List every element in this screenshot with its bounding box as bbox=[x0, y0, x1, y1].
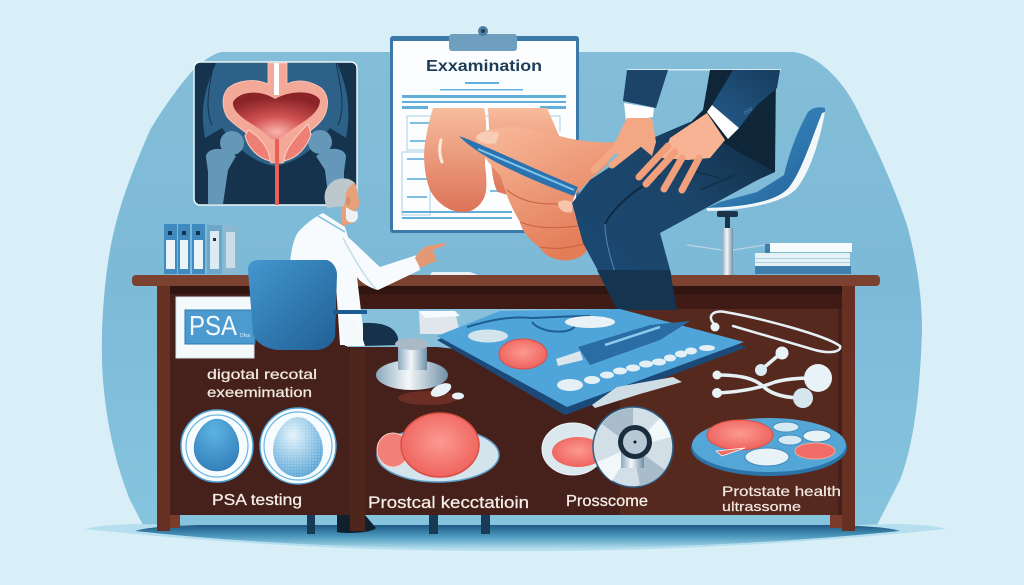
filing binders bbox=[164, 224, 237, 274]
white stethoscope tubing bbox=[710, 312, 840, 352]
background blue shape bbox=[102, 52, 922, 525]
coat bbox=[290, 213, 420, 345]
face bbox=[340, 183, 360, 226]
bladder bbox=[223, 63, 328, 163]
beard bbox=[346, 207, 358, 222]
doctor bbox=[290, 178, 478, 345]
icon: plate with red tissue samples bbox=[377, 413, 499, 482]
lower trouser legs over desk bbox=[597, 270, 677, 310]
blue folder with instruments bbox=[437, 309, 747, 415]
desk bbox=[132, 275, 880, 534]
desk top bbox=[132, 275, 880, 286]
clipboard heading: Exxamination bbox=[426, 58, 542, 75]
jacket body bbox=[690, 70, 776, 190]
left sleeve bbox=[623, 70, 668, 108]
desk body bbox=[157, 286, 855, 515]
anatomical model held up to the clipboard bbox=[424, 108, 560, 212]
left hand on knee bbox=[594, 118, 656, 170]
sleeve buttons: coo bbox=[743, 106, 755, 117]
stack of books bbox=[755, 243, 852, 274]
pen instrument bbox=[556, 351, 583, 366]
label: digital rectal examination: exeemimation bbox=[207, 384, 312, 400]
stethoscope on folder bbox=[467, 316, 590, 327]
jacket collar line bbox=[627, 69, 781, 70]
support legs bbox=[307, 515, 315, 534]
pen clip bbox=[592, 377, 682, 408]
label: digital rectal examination bbox=[207, 366, 317, 400]
label: PSA testing: PSA testing bbox=[212, 492, 302, 509]
PSA document bbox=[176, 297, 255, 358]
presenter's hand with pen bbox=[459, 127, 617, 261]
office chair bbox=[687, 107, 825, 275]
label: digital rectal examination: digotal recotal bbox=[207, 366, 317, 382]
row of pills bbox=[557, 345, 715, 391]
clipboard bbox=[390, 26, 579, 233]
PSA document: PSA bbox=[189, 310, 237, 341]
label: prostate health ultrasound: ultrassome bbox=[722, 499, 801, 514]
right sleeve bbox=[712, 70, 780, 128]
small white box bbox=[419, 311, 460, 334]
trousers bbox=[572, 122, 775, 310]
pointing hand bbox=[415, 243, 446, 268]
knee opening bbox=[347, 309, 625, 360]
anatomy poster bbox=[194, 62, 357, 205]
label: Prosscome: Prosscome bbox=[566, 493, 648, 510]
icon: petri dish and stethoscope disc bbox=[542, 407, 673, 487]
icon: blue ultrasound tray bbox=[691, 418, 847, 476]
white stethoscope earpieces bbox=[712, 346, 832, 408]
hip bones bbox=[206, 130, 346, 204]
patient in dark suit bbox=[572, 69, 781, 310]
desk papers bbox=[430, 272, 478, 275]
doctor's blue chair bbox=[248, 260, 398, 350]
stethoscope chest piece bbox=[376, 338, 464, 405]
red sample bbox=[499, 339, 547, 369]
floor shadow bbox=[85, 524, 946, 551]
label: prostate health ultrasound: Protstate health bbox=[722, 483, 841, 499]
shirt cuffs bbox=[624, 103, 654, 121]
right hand on knee bbox=[639, 113, 725, 190]
hair bbox=[325, 178, 355, 208]
icon: PSA test discs bbox=[181, 408, 336, 484]
prostate lobes bbox=[245, 130, 270, 161]
PSA document: Dfsa bbox=[240, 333, 250, 339]
label: prostate examination: Prostcal kecctatioin bbox=[368, 493, 529, 512]
doctor's shoe bbox=[337, 515, 376, 533]
pen bbox=[459, 136, 578, 196]
desk legs bbox=[157, 286, 170, 531]
label: prostate health ultrasound bbox=[722, 483, 841, 514]
